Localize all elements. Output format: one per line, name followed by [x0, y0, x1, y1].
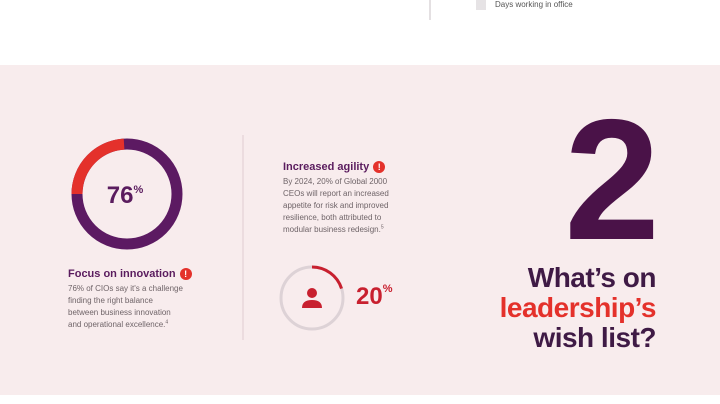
focus on innovation text: Focus on innovation	[68, 268, 176, 280]
focus on innovation text: between business innovation	[68, 308, 171, 317]
heading: what's on leadership's wish list: leadership’s	[500, 292, 656, 323]
focus on innovation text: 76% of CIOs say it's a challenge	[68, 284, 183, 293]
increased agility text: !	[378, 162, 381, 172]
increased agility text: resilience, both attributed to	[283, 213, 381, 222]
increased agility text: modular business redesign.5	[283, 224, 384, 234]
donut chart 76%: %	[133, 184, 143, 196]
focus on innovation text: !	[184, 269, 187, 279]
ring chart 20% with person icon	[280, 266, 344, 330]
focus on innovation text: finding the right balance	[68, 296, 153, 305]
donut chart 76%: 76	[107, 182, 133, 209]
heading: what's on leadership's wish list	[500, 262, 656, 353]
heading: what's on leadership's wish list: What’s on	[528, 262, 656, 293]
20% stat: 20%	[356, 283, 392, 310]
increased agility text	[283, 161, 389, 234]
increased agility text: Increased agility	[283, 161, 369, 173]
donut chart 76%	[72, 138, 182, 250]
focus on innovation text	[68, 268, 192, 329]
heading: what's on leadership's wish list: wish list?	[533, 322, 656, 353]
increased agility text: appetite for risk and improved	[283, 201, 388, 210]
focus on innovation text: and operational excellence.4	[68, 319, 168, 329]
big number 2: 2	[564, 84, 660, 276]
legend: days working in office: Days working in office	[495, 0, 573, 9]
increased agility text: CEOs will report an increased	[283, 189, 389, 198]
increased agility text: By 2024, 20% of Global 2000	[283, 177, 387, 186]
